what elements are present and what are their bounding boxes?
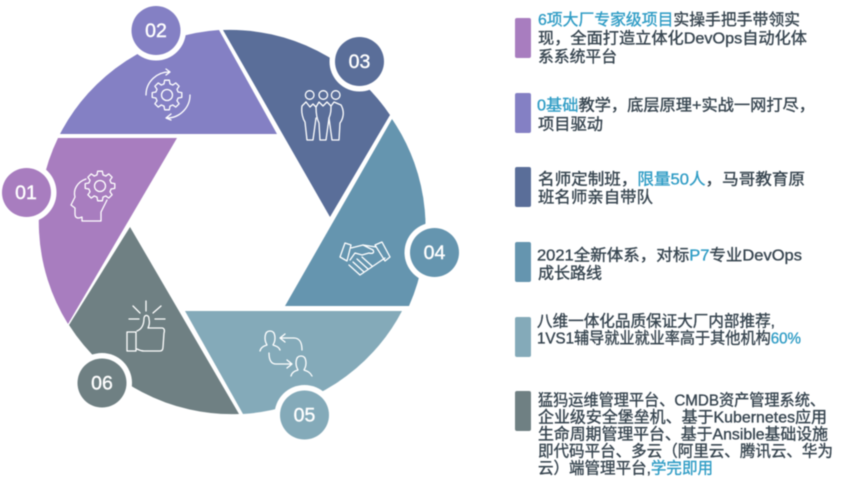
badge 05 <box>274 385 334 445</box>
segment 01 <box>39 138 177 324</box>
text 3: 名师定制班，限量50人，马哥教育原 <box>538 170 805 188</box>
badge 03: 03 <box>349 51 370 73</box>
badge 02: 02 <box>145 20 167 42</box>
legend item 5 <box>515 312 801 357</box>
text 1: 现，全面打造立体化DevOps自动化体 <box>538 30 807 48</box>
text 4: 2021全新体系，对标 P7专业DevOps <box>537 246 802 264</box>
badge 02 <box>126 0 186 60</box>
panel: aperture diagram <box>0 0 464 445</box>
badge 04 <box>404 222 464 282</box>
text 6: 生命周期管理平台、基于Ansible基础设施 <box>538 426 828 444</box>
text 4: 成长路线 <box>538 264 602 282</box>
color bar 2 <box>515 93 531 133</box>
text 3: 班名师亲自带队 <box>538 188 653 206</box>
segment 02 <box>60 30 277 134</box>
legend item 2 <box>515 93 815 134</box>
text 2: 项目驱动 <box>538 116 603 134</box>
text 6 <box>538 392 833 478</box>
legend item 6 <box>515 391 833 478</box>
text 3 <box>538 170 805 206</box>
icon: handshake <box>340 242 390 275</box>
badge 04: 04 <box>424 242 445 264</box>
icon: gear with cycle arrows <box>146 69 190 120</box>
text 1: 系系统平台 <box>538 48 617 66</box>
color bar 5 <box>515 317 531 357</box>
text 6: 即代码平台、多云（阿里云、腾讯云、华为 <box>538 442 833 460</box>
text 6: 云）端管理平台,学完即用 <box>538 460 713 478</box>
icon: two people exchanging <box>260 331 312 376</box>
text 5: 八维一体化品质保证大厂内部推荐, <box>537 312 775 330</box>
legend item 3 <box>515 167 805 207</box>
badge 05: 05 <box>294 404 315 426</box>
icon: three people <box>302 91 343 140</box>
badge 06 <box>72 353 132 413</box>
badge 01: 01 <box>15 182 37 204</box>
text 4 <box>537 246 802 282</box>
legend item 1 <box>515 11 807 66</box>
text 1 <box>538 11 807 66</box>
text 1: 6项大厂专家级项目实操手把手带领实 <box>538 11 800 29</box>
badge 01 <box>0 162 56 222</box>
icon: thumbs up <box>127 301 165 351</box>
legend item 4 <box>515 242 802 282</box>
color bar 4 <box>515 242 531 282</box>
icon: head with gear <box>71 171 115 221</box>
text 5: 1VS1辅导就业就业率高于其他机构60% <box>537 330 801 348</box>
text 6: 企业级安全堡垒机、基于Kubernetes应用 <box>538 408 827 426</box>
color bar 6 <box>515 391 531 431</box>
color bar 3 <box>515 167 531 207</box>
segment 03 <box>223 30 390 217</box>
text 6: 猛犸运维管理平台、CMDB资产管理系统、 <box>538 392 825 410</box>
text 2: 0基础教学，底层原理+实战一网打尽， <box>537 96 815 114</box>
segment 06 <box>69 227 239 414</box>
text 5 <box>537 312 801 348</box>
badge 03 <box>330 32 390 92</box>
segment 05 <box>185 311 402 414</box>
badge 06: 06 <box>91 372 113 394</box>
text 2 <box>537 96 815 134</box>
color bar 1 <box>515 18 531 58</box>
segment 04 <box>285 119 426 306</box>
